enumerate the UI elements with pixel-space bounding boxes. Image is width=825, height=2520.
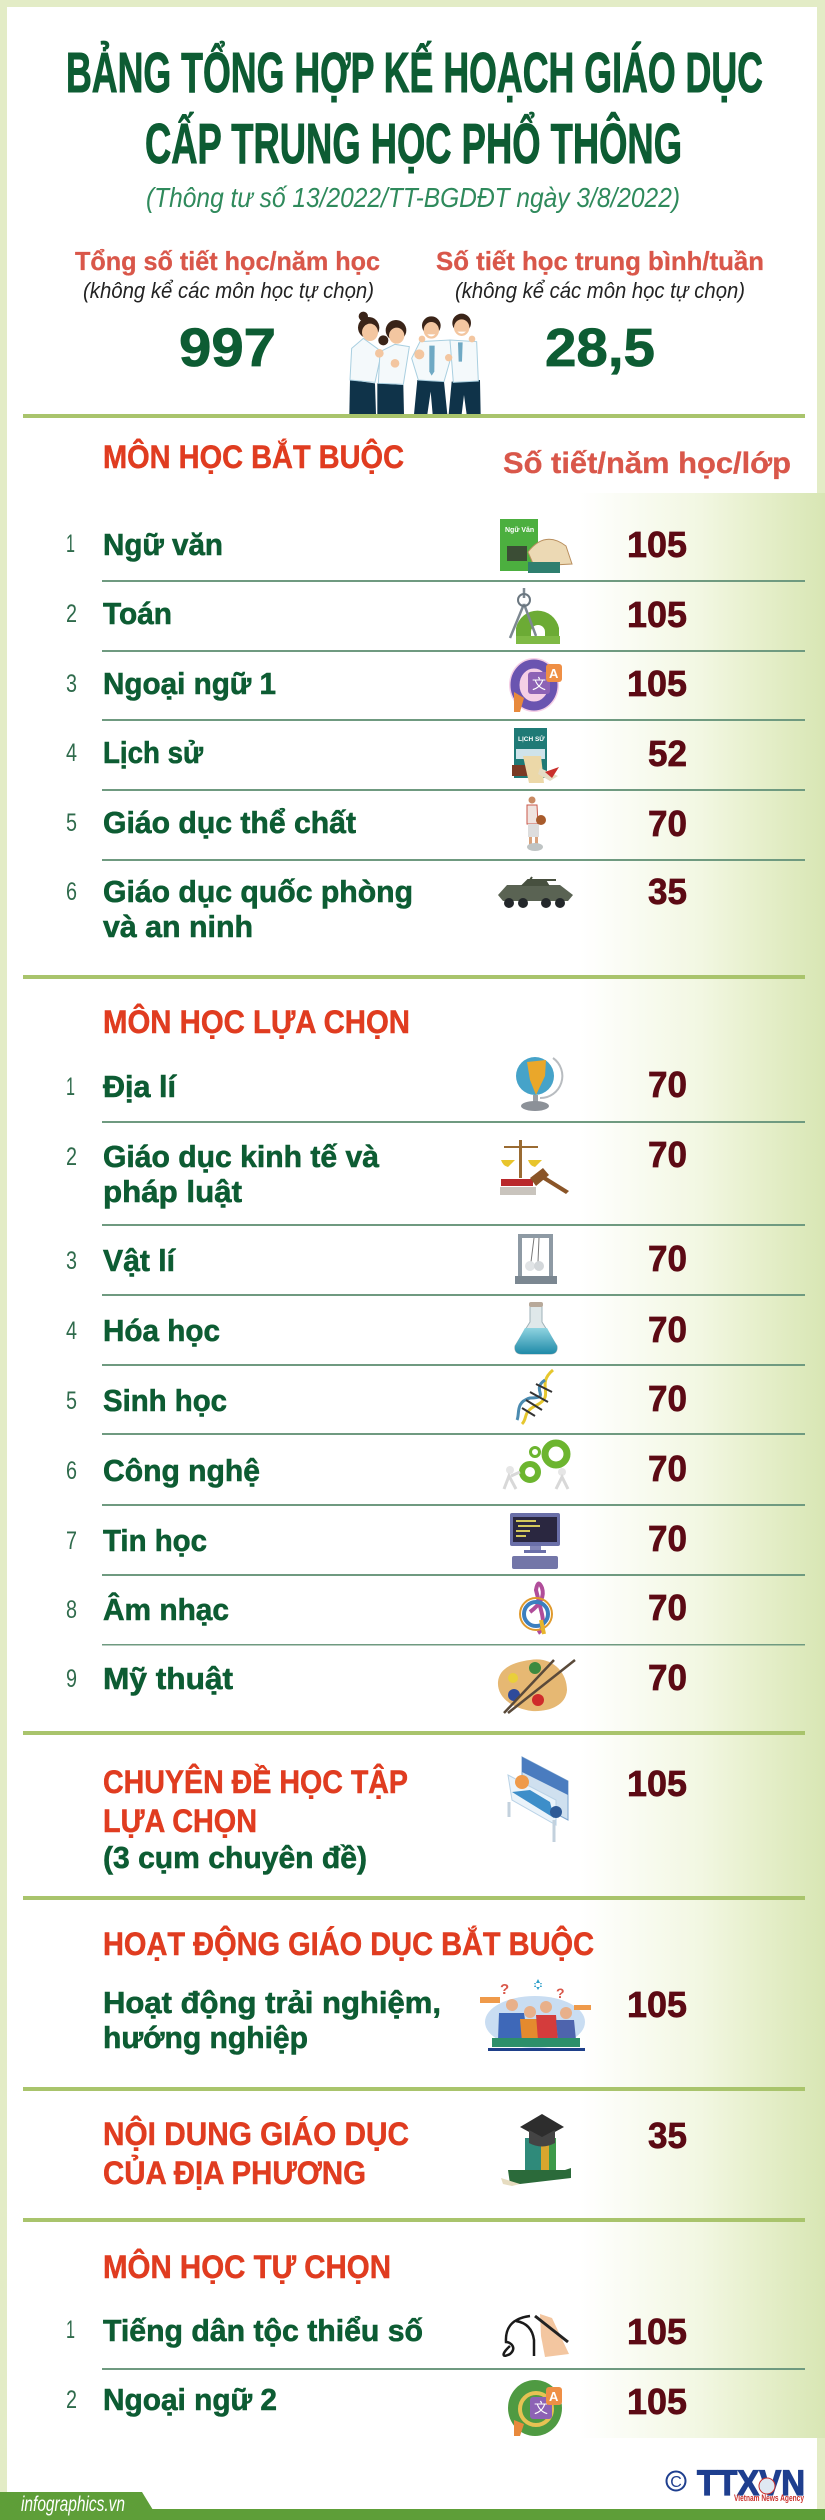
- icon: history book and scroll: [512, 728, 559, 783]
- row: Vật lí: Vật lí: [103, 1243, 176, 1278]
- logo: TTXVN: C: [670, 2474, 682, 2491]
- icon: literature book: Ngữ Văn: [505, 527, 534, 534]
- stat: total periods per year: Tổng số tiết học/năm học: [75, 246, 380, 276]
- row divider: [102, 1294, 805, 1296]
- icon: students in discussion: ?: [556, 1985, 565, 2001]
- block: elective thematic topics: 105: [627, 1763, 687, 1804]
- row: Vật lí: 3: [66, 1247, 77, 1275]
- row: Giáo dục quốc phòng và an ninh: 6: [66, 878, 77, 906]
- icon: students in discussion: ?: [500, 1981, 509, 1998]
- section rule: [23, 1896, 805, 1900]
- block: compulsory education activities: 105: [627, 1984, 687, 2025]
- icon: data chart board: [508, 1757, 568, 1842]
- row: Sinh học: 70: [648, 1378, 687, 1419]
- row: Giáo dục quốc phòng và an ninh: [66, 871, 687, 944]
- row: Ngoại ngữ 2: [66, 2380, 687, 2436]
- icon: paint palette: [498, 1659, 575, 1713]
- icon: compass and protractor: [510, 588, 560, 644]
- row divider: [102, 2368, 805, 2370]
- icon: scales and gavel: [500, 1140, 569, 1195]
- row: Tiếng dân tộc thiểu số: 1: [66, 2316, 75, 2344]
- stat: total periods per year: (không kể các môn học tự chọn): [83, 278, 374, 303]
- row: Giáo dục kinh tế và pháp luật: Giáo dục kinh tế và: [103, 1139, 380, 1174]
- row divider: [102, 580, 805, 582]
- row: Ngoại ngữ 1: 105: [627, 663, 687, 704]
- row: Giáo dục thể chất: 70: [648, 803, 687, 844]
- row divider: [102, 1504, 805, 1506]
- row divider: [102, 719, 805, 721]
- row: Vật lí: [66, 1234, 687, 1284]
- block: local education content: [103, 2114, 687, 2191]
- row: Địa lí: Địa lí: [103, 1069, 177, 1104]
- heading: optional subjects: MÔN HỌC TỰ CHỌN: [103, 2249, 391, 2285]
- icon: translation: 文: [532, 676, 546, 692]
- row: Địa lí: 1: [66, 1073, 75, 1101]
- row: Ngoại ngữ 1: 3: [66, 670, 77, 698]
- row: Ngữ văn: 105: [627, 524, 687, 565]
- row: Công nghệ: 6: [66, 1457, 77, 1485]
- row: Lịch sử: Lịch sử: [103, 735, 203, 770]
- row: Tiếng dân tộc thiểu số: 105: [627, 2311, 687, 2352]
- block: compulsory education activities: Hoạt động trải nghiệm,: [103, 1985, 441, 2020]
- row: Hóa học: [66, 1302, 687, 1354]
- heading: elective subjects: MÔN HỌC LỰA CHỌN: [103, 1004, 410, 1040]
- row: Sinh học: Sinh học: [103, 1383, 227, 1418]
- block: compulsory education activities: [103, 1926, 687, 2055]
- row: Âm nhạc: 8: [66, 1596, 77, 1624]
- icon: history book and scroll: LỊCH SỬ: [518, 734, 545, 743]
- panel: upper white area: [7, 7, 817, 493]
- icon: translation, green: [508, 2380, 562, 2436]
- block: compulsory education activities: HOẠT ĐỘNG GIÁO DỤC BẮT BUỘC: [103, 1926, 594, 1962]
- row: Tiếng dân tộc thiểu số: Tiếng dân tộc thiểu số: [103, 2313, 423, 2348]
- row: Tin học: Tin học: [103, 1523, 207, 1558]
- row divider: [102, 1644, 805, 1646]
- row: Toán: 105: [627, 594, 687, 635]
- row divider: [102, 650, 805, 652]
- icon: computer: [510, 1513, 560, 1569]
- block: local education content: CỦA ĐỊA PHƯƠNG: [103, 2155, 366, 2191]
- panel: gradient content area: [7, 493, 825, 2438]
- row divider: [102, 1433, 805, 1435]
- row divider: [102, 859, 805, 861]
- block: elective thematic topics: LỰA CHỌN: [103, 1803, 257, 1839]
- icon: literature book: [500, 519, 572, 573]
- row: Giáo dục thể chất: 5: [66, 809, 77, 837]
- icon: graduation cap and books: [501, 2114, 571, 2186]
- icon: translation: A: [549, 666, 559, 681]
- icon: treble clef: [520, 1583, 552, 1634]
- row: Sinh học: [66, 1370, 687, 1424]
- row divider: [102, 1224, 805, 1226]
- row: Giáo dục thể chất: [66, 796, 687, 851]
- row: Mỹ thuật: [66, 1657, 687, 1713]
- row: Vật lí: 70: [648, 1238, 687, 1279]
- row: Tin học: 70: [648, 1518, 687, 1559]
- subtitle: (Thông tư số 13/2022/TT-BGDĐT ngày 3/8/2022): [146, 182, 680, 213]
- icon: translation: [509, 658, 562, 712]
- stat: average periods per week: (không kể các môn học tự chọn): [455, 278, 745, 303]
- row: Tin học: [66, 1513, 687, 1569]
- row: Lịch sử: [66, 728, 687, 783]
- icon: translation, green: A: [549, 2389, 559, 2404]
- row: Địa lí: [66, 1057, 687, 1111]
- row: Giáo dục kinh tế và pháp luật: [66, 1134, 687, 1209]
- panel: lower white area: [7, 2438, 817, 2509]
- row: Hóa học: 4: [66, 1317, 77, 1345]
- footer tab: infographics.vn: infographics.vn: [21, 2493, 125, 2516]
- row: Công nghệ: 70: [648, 1448, 687, 1489]
- row: Hóa học: Hóa học: [103, 1313, 220, 1348]
- row: Giáo dục kinh tế và pháp luật: 70: [648, 1134, 687, 1175]
- row divider: [102, 789, 805, 791]
- row: Công nghệ: Công nghệ: [103, 1453, 260, 1488]
- stat: average periods per week: 28,5: [545, 318, 655, 378]
- stat: average periods per week: Số tiết học trung bình/tuần: [436, 246, 764, 276]
- row: Tin học: 7: [66, 1527, 77, 1555]
- section rule: [23, 2087, 805, 2091]
- block: elective thematic topics: [103, 1757, 687, 1875]
- block: local education content: NỘI DUNG GIÁO DỤC: [103, 2116, 409, 2152]
- block: compulsory education activities: hướng nghiệp: [103, 2020, 308, 2055]
- row: Lịch sử: 4: [66, 739, 77, 767]
- row: Ngoại ngữ 1: Ngoại ngữ 1: [103, 666, 276, 701]
- row: Âm nhạc: 70: [648, 1587, 687, 1628]
- row: Ngoại ngữ 2: 105: [627, 2381, 687, 2422]
- block: local education content: 35: [648, 2115, 687, 2156]
- section rule: [23, 975, 805, 979]
- row: Ngữ văn: Ngữ văn: [103, 527, 223, 562]
- stat: average periods per week: [436, 246, 764, 378]
- row: Toán: 2: [66, 600, 77, 628]
- row: Mỹ thuật: 9: [66, 1665, 77, 1693]
- icon: chemistry flask: [515, 1302, 557, 1354]
- footer bar: [0, 2509, 825, 2520]
- row: Mỹ thuật: 70: [648, 1657, 687, 1698]
- section rule: [23, 2218, 805, 2222]
- icon: armoured vehicle: [498, 877, 573, 908]
- icon: globe: [516, 1057, 562, 1111]
- row: Giáo dục kinh tế và pháp luật: 2: [66, 1143, 77, 1171]
- section rule: [23, 414, 805, 418]
- row: Giáo dục quốc phòng và an ninh: 35: [648, 871, 687, 912]
- stat: total periods per year: 997: [179, 318, 276, 378]
- column heading: periods per year per class: Số tiết/năm học/lớp: [503, 447, 791, 480]
- row divider: [102, 1364, 805, 1366]
- icon: Newton's cradle: [515, 1234, 557, 1284]
- icon: basketball player: [527, 796, 546, 851]
- row: Ngoại ngữ 2: 2: [66, 2386, 77, 2414]
- block: elective thematic topics: (3 cụm chuyên đề): [103, 1840, 367, 1875]
- row: Ngoại ngữ 1: [66, 658, 687, 712]
- row: Âm nhạc: Âm nhạc: [103, 1591, 229, 1627]
- row: Tiếng dân tộc thiểu số: [66, 2311, 687, 2357]
- row: Giáo dục quốc phòng và an ninh: và an ninh: [103, 909, 253, 944]
- stat: total periods per year: [75, 246, 380, 378]
- row: Toán: [66, 588, 687, 644]
- row divider: [102, 1121, 805, 1123]
- row: Ngoại ngữ 2: Ngoại ngữ 2: [103, 2382, 277, 2417]
- row: Mỹ thuật: Mỹ thuật: [103, 1661, 233, 1696]
- row: Giáo dục kinh tế và pháp luật: pháp luật: [103, 1174, 242, 1209]
- row: Hóa học: 70: [648, 1309, 687, 1350]
- icon: four students: [349, 312, 481, 414]
- title: [66, 40, 763, 176]
- row: Địa lí: 70: [648, 1064, 687, 1105]
- row: Ngữ văn: 1: [66, 530, 75, 558]
- row: Ngữ văn: [66, 519, 687, 573]
- row: Toán: Toán: [103, 596, 172, 631]
- icon: translation, green: 文: [534, 2400, 548, 2416]
- row: Công nghệ: [66, 1443, 687, 1489]
- heading: compulsory subjects: MÔN HỌC BẮT BUỘC: [103, 439, 404, 475]
- logo: TTXVN: TTXVN: [697, 2464, 805, 2503]
- row: Sinh học: 5: [66, 1387, 77, 1415]
- row divider: [102, 1574, 805, 1576]
- row: Giáo dục thể chất: Giáo dục thể chất: [103, 805, 356, 840]
- row: Âm nhạc: [66, 1583, 687, 1634]
- section rule: [23, 1731, 805, 1735]
- icon: hand writing script: [504, 2314, 569, 2357]
- block: elective thematic topics: CHUYÊN ĐỀ HỌC TẬP: [103, 1764, 408, 1800]
- icon: DNA helix: [517, 1370, 553, 1424]
- row: Lịch sử: 52: [648, 733, 687, 774]
- icon: students in discussion: [480, 1979, 591, 2051]
- row: Giáo dục quốc phòng và an ninh: Giáo dục quốc phòng: [103, 874, 413, 909]
- icon: people with gears: [504, 1443, 568, 1489]
